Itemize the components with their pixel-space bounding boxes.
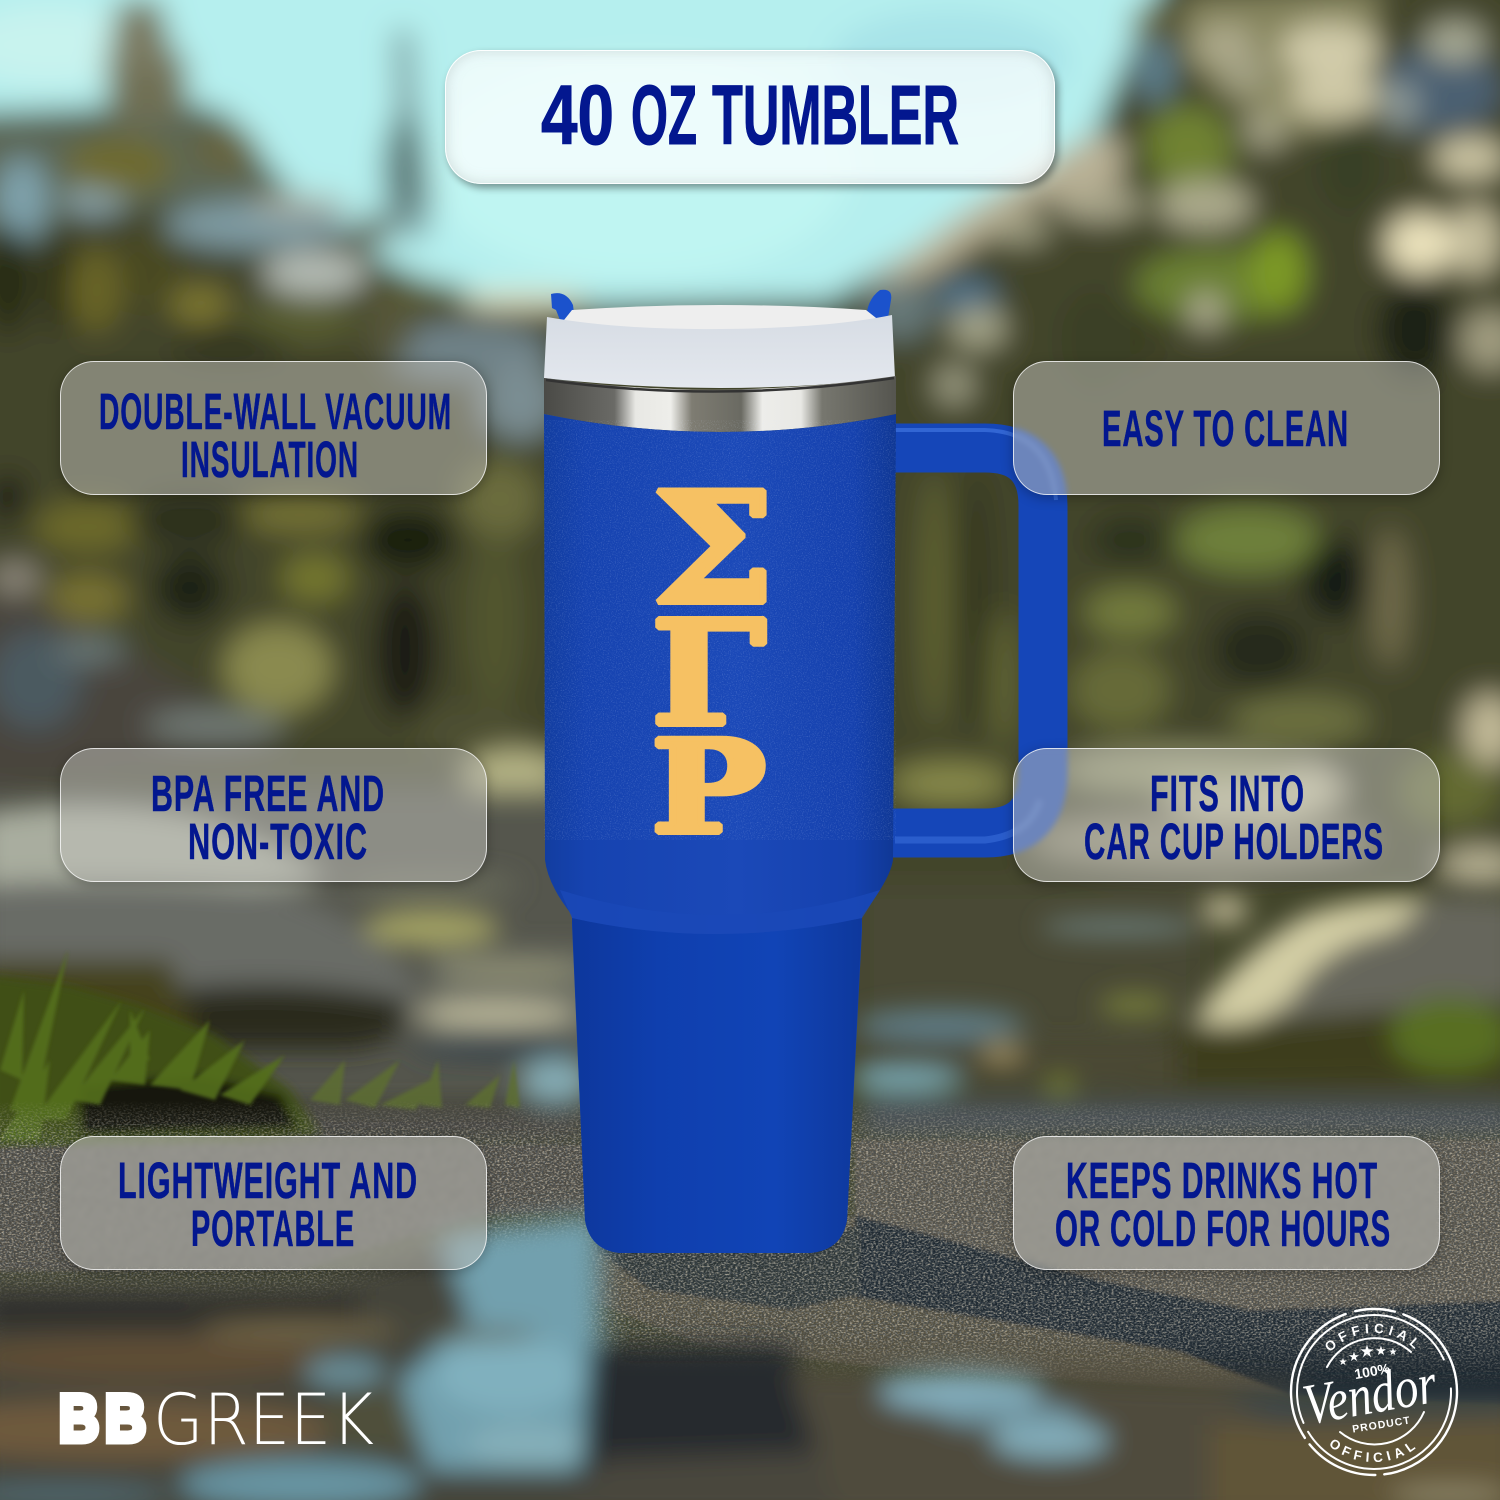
badge: official 100% vendor product: ★ [1339, 1357, 1348, 1368]
title text [541, 68, 959, 162]
left mountain and tree [105, 0, 190, 120]
tumbler handle [880, 430, 1056, 840]
water and reflections [0, 1215, 1500, 1500]
shoulder highlight [560, 890, 880, 934]
logo: BB GREEK: B [59, 1381, 99, 1455]
right rock [1190, 895, 1500, 1040]
title text: OZ [631, 68, 697, 162]
grass tuft [0, 950, 520, 1150]
tumbler steel band [544, 376, 896, 432]
logo: BB GREEK: GREEK [153, 1379, 374, 1461]
logo: BB GREEK [59, 1379, 374, 1461]
tumbler lid [544, 305, 895, 388]
gravel ground [0, 1140, 1500, 1405]
title text: 40 [541, 68, 614, 162]
panel: lightweight and portable [60, 1136, 487, 1270]
panel: bpa free and non-toxic [60, 748, 487, 882]
badge: official 100% vendor product: ★ [1375, 1344, 1387, 1359]
badge: official 100% vendor product: ★ [1389, 1347, 1398, 1358]
right cliffs and trees [1130, 6, 1170, 38]
grass body [0, 975, 320, 1150]
greek letters: Ρ [651, 713, 766, 863]
greek letters [651, 459, 775, 863]
badge: official 100% vendor product: Vendor [1298, 1350, 1442, 1437]
left forest [0, 224, 28, 336]
greek letters: Σ [651, 459, 775, 639]
panel: keeps drinks hot or cold for hours [1013, 1136, 1440, 1270]
panel: fits into car cup holders [1013, 748, 1440, 882]
greek letters: Γ [651, 589, 766, 758]
badge: official 100% vendor product: ★ [1348, 1350, 1360, 1365]
badge: official 100% vendor product: 100% [1353, 1360, 1392, 1382]
logo: BB GREEK: B [105, 1381, 146, 1455]
foreground rocks and river [0, 805, 1500, 1145]
badge: official 100% vendor product: OFFICIAL [1330, 1440, 1416, 1462]
sky [0, 0, 1200, 305]
badge: official 100% vendor product [1290, 1308, 1458, 1476]
grass blades [0, 950, 285, 1140]
tumbler body [544, 414, 896, 1253]
panel: fits into car cup holders: FITS INTO [1150, 765, 1305, 822]
badge: official 100% vendor product: OFFICIAL [1326, 1324, 1417, 1350]
title text: TUMBLER [712, 68, 959, 162]
distant gravel strip [860, 1098, 1500, 1138]
upper scene [0, 0, 1500, 1200]
badge: official 100% vendor product: ★ [1359, 1342, 1375, 1362]
panel: double-wall vacuum insulation [60, 361, 487, 495]
panel: bpa free and non-toxic: NON-TOXIC [188, 813, 368, 870]
title panel [445, 50, 1055, 184]
badge: official 100% vendor product: PRODUCT [1351, 1415, 1412, 1436]
tumbler straw tabs [551, 290, 891, 322]
panel: lightweight and portable: PORTABLE [191, 1200, 355, 1257]
centre reflection [580, 1345, 840, 1480]
panel: easy to clean [1013, 361, 1440, 495]
midground [465, 751, 565, 799]
lower cup section [572, 918, 862, 1253]
